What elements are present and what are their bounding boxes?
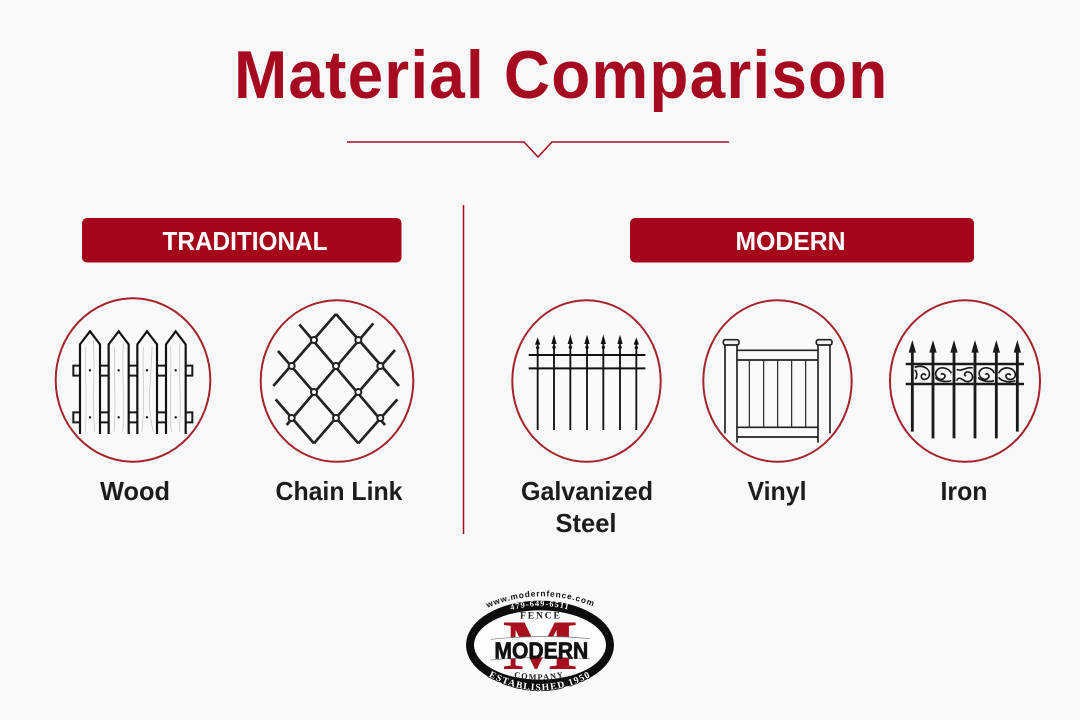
logo: Modern Fence Company: www.modernfence.com: [486, 590, 594, 608]
panel: chain link: [261, 300, 413, 506]
title underline with chevron: [347, 142, 729, 157]
logo: Modern Fence Company: M: [503, 607, 578, 685]
icon: picket fence: [73, 331, 192, 434]
heading: modern: [630, 218, 974, 262]
label: iron: Iron: [940, 476, 988, 506]
label: vinyl: Vinyl: [748, 476, 806, 506]
panel: galvanized steel: [512, 300, 661, 538]
icon circle: chain link: [261, 300, 413, 462]
logo: Modern Fence Company: ESTABLISHED 1950: [488, 670, 590, 692]
icon: spear-top steel fence: [529, 335, 645, 430]
icon circle: vinyl: [703, 300, 852, 462]
icon circle: iron: [890, 300, 1040, 462]
centre divider: [462, 205, 464, 534]
heading: traditional: TRADITIONAL: [162, 226, 328, 256]
heading: modern: MODERN: [736, 226, 846, 256]
panel: iron: [890, 300, 1040, 506]
heading: traditional: [82, 218, 402, 262]
label: wood: Wood: [100, 476, 170, 506]
label line two: Steel: [556, 508, 616, 538]
logo: Modern Fence Company: FENCE: [520, 611, 560, 622]
icon: ornamental iron fence: [906, 340, 1024, 438]
icon: vinyl fence: [723, 340, 832, 443]
panel: vinyl: [703, 300, 852, 506]
icon: chain link mesh: [273, 314, 399, 443]
icon circle: galvanized steel: [512, 300, 661, 462]
logo: Modern Fence Company: 479-649-6511: [510, 600, 568, 610]
logo: Modern Fence Company: [466, 590, 614, 692]
logo: Modern Fence Company: COMPANY: [514, 672, 562, 680]
logo: Modern Fence Company: MODERN: [494, 638, 588, 664]
panel: wood: [56, 298, 210, 506]
icon circle: wood: [56, 298, 210, 462]
label: galvanized steel: Galvanized: [521, 476, 653, 506]
label: chain link: Chain Link: [276, 476, 403, 506]
title: Material Comparison: [234, 36, 887, 112]
